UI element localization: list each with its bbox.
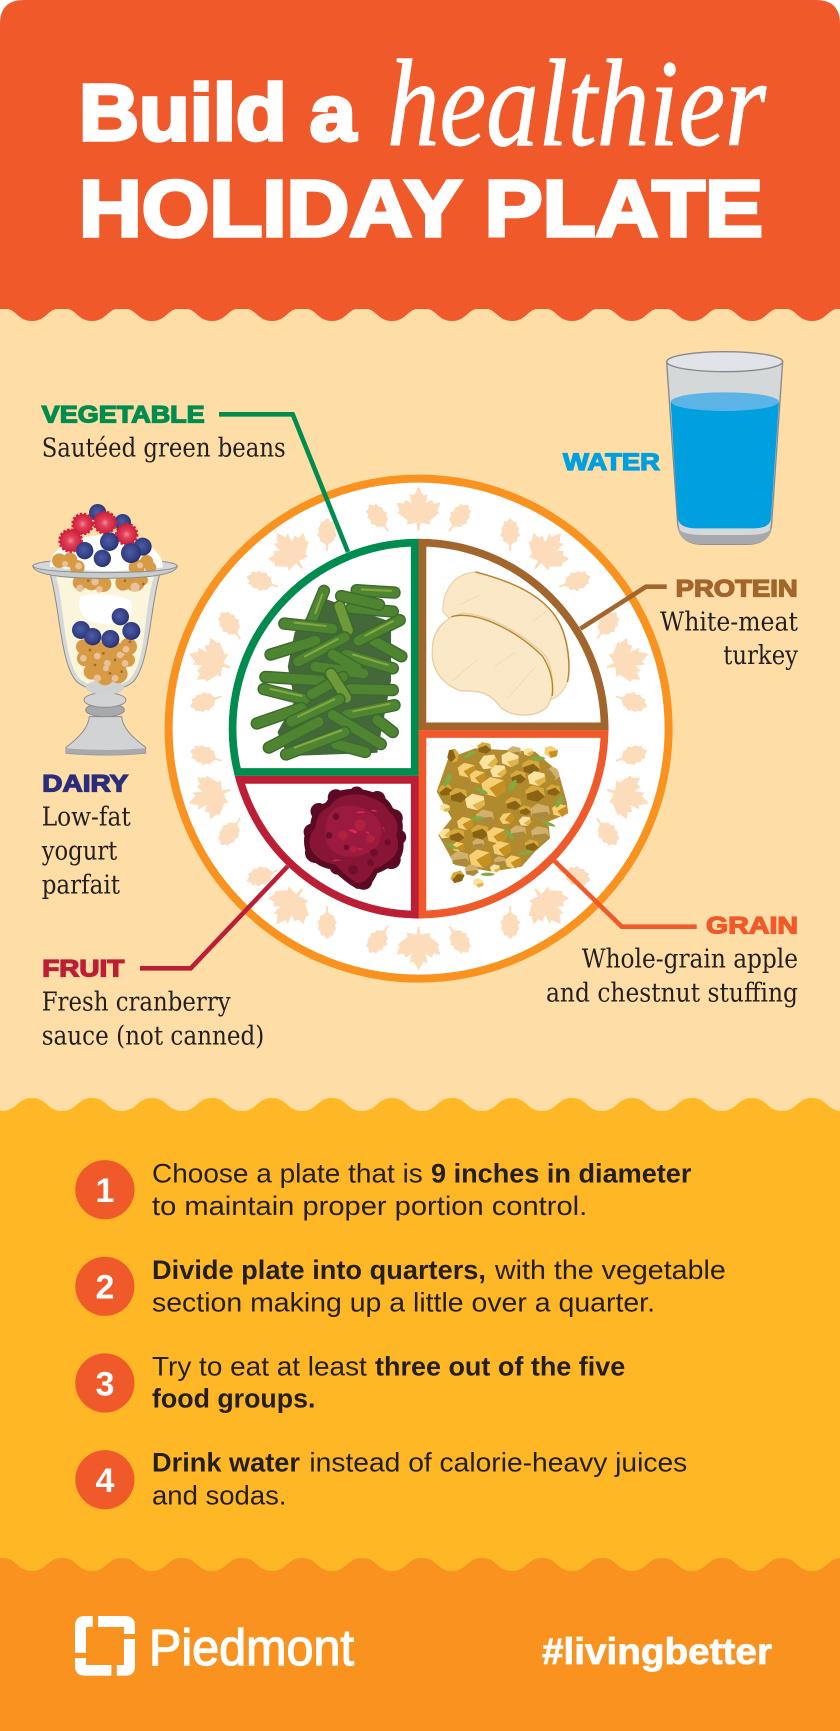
parfait whipped yogurt [50, 535, 163, 571]
step 2: 2 [95, 1269, 114, 1307]
leader: fruit [140, 866, 288, 968]
steps panel [0, 1085, 840, 1565]
step 2 [75, 1255, 726, 1318]
cream plate background [0, 300, 840, 1120]
parfait cup [50, 573, 160, 695]
step 4: and sodas. [152, 1480, 286, 1510]
step 3: Try to eat at least [152, 1352, 367, 1382]
label: dairy: Low-fat [42, 803, 131, 833]
section: fruit quadrant [240, 780, 415, 915]
label: dairy: DAIRY [42, 771, 128, 798]
step 1: to maintain proper portion control. [152, 1191, 587, 1221]
step 4 [75, 1448, 687, 1510]
label: grain: and chestnut stuffing [546, 979, 798, 1009]
step 2: with the vegetable [494, 1255, 726, 1285]
icon: water glass [667, 352, 783, 544]
logo wordmark: Piedmont [149, 1619, 354, 1676]
step 1 [75, 1159, 691, 1221]
section: protein quadrant [422, 543, 605, 726]
step 2: section making up a little over a quarter. [152, 1288, 655, 1318]
title: HOLIDAY PLATE [79, 164, 763, 253]
label: grain: Whole-grain apple [582, 945, 798, 975]
leader: protein [580, 587, 667, 629]
label: dairy: yogurt [41, 836, 118, 866]
icon: turkey slices [432, 572, 569, 715]
section: vegetable quadrant [233, 543, 415, 772]
label: grain: GRAIN [706, 912, 798, 939]
hashtag: #livingbetter [542, 1631, 772, 1672]
icon: stuffing [437, 742, 568, 889]
step 1: 9 inches in diameter [431, 1159, 691, 1189]
parfait base [66, 693, 146, 755]
label: protein: turkey [723, 641, 798, 671]
label: fruit: FRUIT [42, 956, 125, 983]
label: vegetable: Sautéed green beans [42, 434, 286, 464]
label: fruit [42, 956, 264, 1051]
label: fruit: Fresh cranberry [42, 988, 231, 1018]
step 1: 1 [95, 1172, 114, 1210]
label: vegetable: VEGETABLE [42, 402, 205, 429]
parfait top granola [52, 553, 156, 575]
step 3: 3 [95, 1365, 114, 1403]
title: Build a [79, 68, 357, 157]
section: grain quadrant [422, 734, 604, 915]
label: dairy: parfait [42, 870, 120, 900]
leader: vegetable [219, 414, 348, 552]
leader: grain [555, 861, 697, 927]
step 2: Divide plate into quarters, [152, 1255, 486, 1285]
icon: Piedmont logo mark [75, 1616, 135, 1676]
label: vegetable [42, 402, 286, 464]
step 4: instead of calorie-heavy juices [309, 1448, 687, 1478]
title: healthier [387, 35, 767, 172]
title [79, 35, 767, 253]
footer band [0, 1550, 840, 1731]
icon: yogurt parfait [33, 504, 177, 755]
header band [0, 0, 840, 321]
label: grain [546, 912, 798, 1009]
step 4: 4 [95, 1462, 114, 1500]
label: protein: White-meat [660, 608, 798, 638]
plate [169, 479, 669, 979]
icon: cranberry sauce [304, 786, 406, 890]
label: water: WATER [563, 449, 660, 476]
parfait berries [60, 504, 152, 648]
label: protein: PROTEIN [676, 576, 798, 603]
leaf border [182, 487, 656, 971]
label: fruit: sauce (not canned) [42, 1021, 264, 1051]
parfait granola [73, 572, 148, 685]
step 3: food groups. [152, 1384, 315, 1414]
step 1: Choose a plate that is [152, 1159, 423, 1189]
icon: green beans [257, 589, 401, 756]
step 3 [75, 1352, 625, 1414]
label: protein [660, 576, 798, 671]
parfait rim [33, 566, 177, 578]
label: dairy [41, 771, 131, 900]
step 3: three out of the five [375, 1352, 625, 1382]
step 4: Drink water [152, 1448, 300, 1478]
